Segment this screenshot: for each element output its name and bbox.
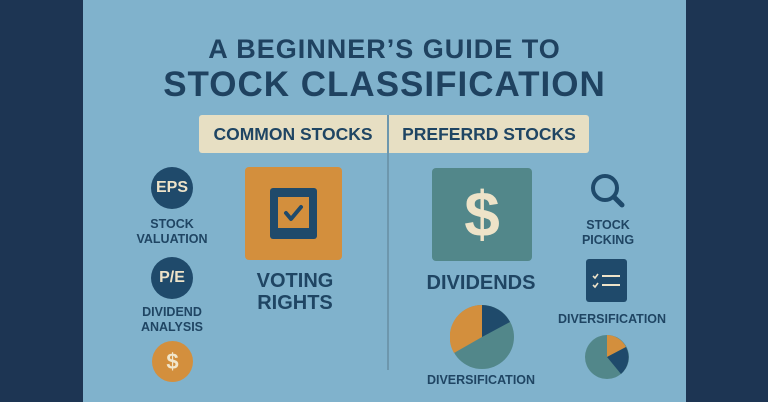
text: stock picking: STOCK [586, 218, 630, 232]
icon: P/E [151, 257, 193, 299]
icon: EPS: EPS [156, 179, 188, 196]
icon: dividends dollar: $ [464, 178, 500, 250]
title: A BEGINNER’S GUIDE TO [208, 34, 561, 64]
icon: dollar coin: $ [166, 349, 179, 374]
heading: preferred stocks: PREFERRD STOCKS [402, 124, 576, 144]
title [163, 34, 606, 104]
divider [387, 115, 389, 370]
title: STOCK CLASSIFICATION [163, 65, 606, 104]
text: stock valuation: VALUATION [136, 232, 208, 246]
icon: voting checkbox [245, 167, 342, 260]
banner [199, 115, 589, 153]
text: stock valuation: STOCK [150, 217, 194, 231]
text: stock valuation [136, 217, 208, 246]
left side bar [0, 0, 83, 402]
text: dividend analysis: DIVIDEND [142, 305, 202, 319]
text: stock picking: PICKING [582, 233, 634, 247]
text: voting rights: VOTING [257, 270, 333, 292]
icon: P/E: P/E [159, 269, 185, 286]
text: voting rights: RIGHTS [257, 292, 333, 314]
right side bar [686, 0, 768, 402]
chart: pie large [450, 305, 514, 369]
icon: EPS [151, 167, 193, 209]
text: dividends: DIVIDENDS [427, 272, 535, 294]
icon: dollar coin [152, 341, 193, 382]
text: voting rights [256, 270, 333, 314]
text: diversification (pie): DIVERSIFICATION [427, 373, 535, 387]
heading: common stocks: COMMON STOCKS [213, 124, 373, 144]
icon: dividends dollar [432, 168, 532, 261]
text: dividend analysis: ANALYSIS [141, 320, 203, 334]
text: stock picking [582, 218, 634, 247]
icon: magnifier [591, 174, 624, 208]
text: dividend analysis [141, 305, 203, 334]
chart: pie small [585, 335, 629, 379]
icon: checklist [586, 259, 627, 302]
text: diversification (checklist): DIVERSIFICATION [558, 312, 666, 326]
